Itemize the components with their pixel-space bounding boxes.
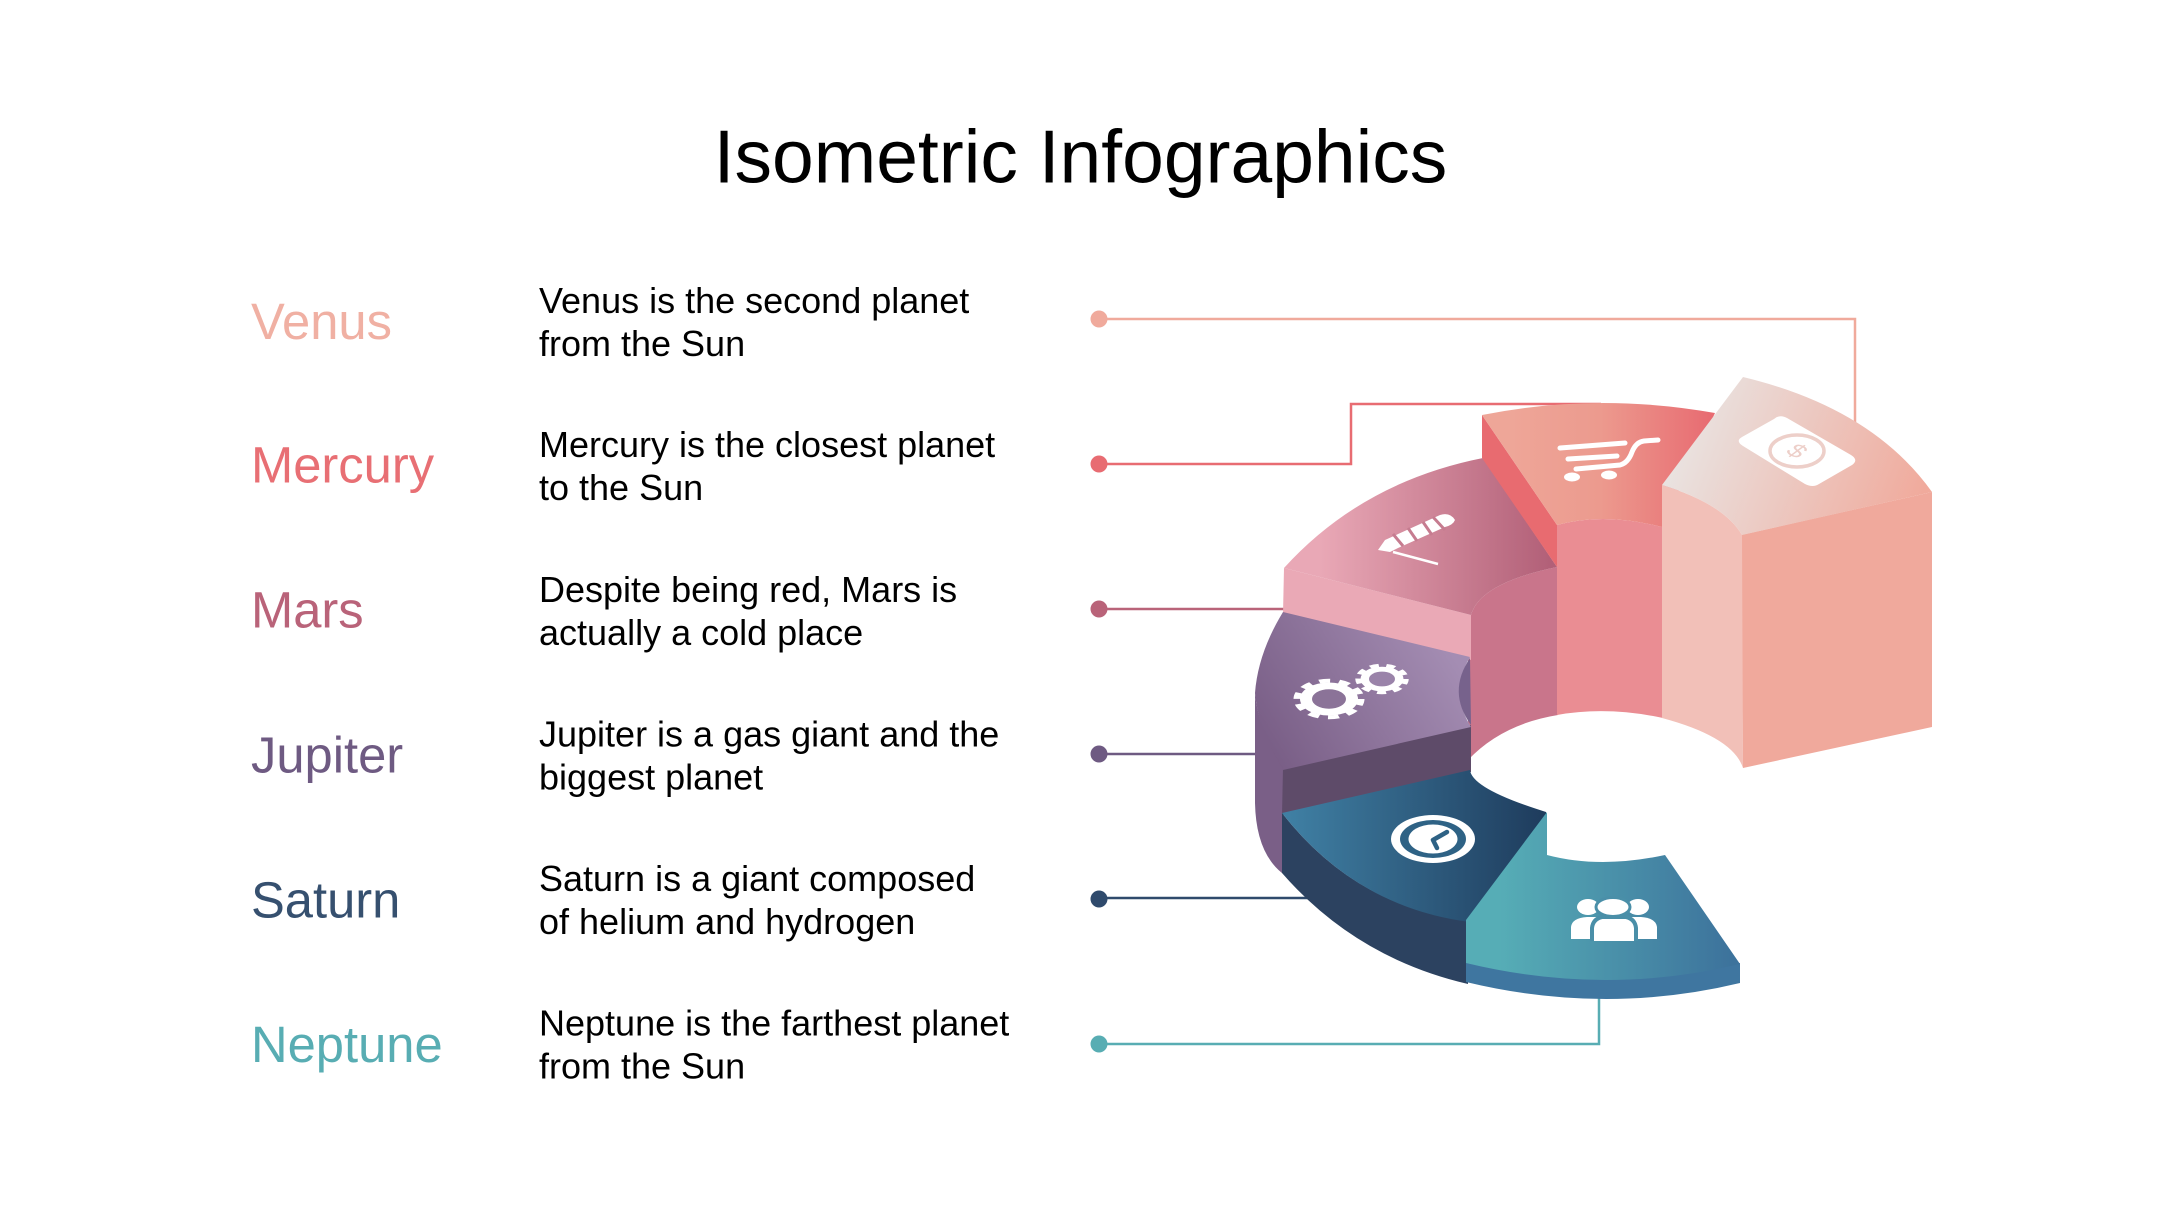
connector: Neptune [1090,990,1599,1052]
text: Neptune description: Neptune is the farthest planet [539,1002,1009,1044]
text: Jupiter description: biggest planet [539,756,763,798]
text: Venus description: from the Sun [539,323,745,364]
text: Neptune description: from the Sun [539,1046,745,1086]
icon: clock [1391,815,1475,863]
icon: people [1571,898,1657,941]
segment: Jupiter [1255,612,1471,873]
text: Venus description: Venus is the second planet [539,280,969,321]
text: Jupiter description: Jupiter is a gas giant and the [539,714,999,754]
text: Mercury description: to the Sun [539,467,703,508]
segment: Saturn [1282,770,1546,984]
text: Mercury description: Mercury is the closest planet [539,424,995,465]
icon: dollar bill: $ [1780,440,1814,463]
connector: Mars [1090,600,1290,618]
label: Jupiter: Jupiter [251,726,403,784]
text: Saturn description: Saturn is a giant composed [539,858,975,899]
connector: Venus [1090,310,1855,430]
label: Mars: Mars [251,582,364,638]
icon: shopping cart [1560,440,1658,482]
connector: Mercury [1090,404,1601,472]
connector: Jupiter [1090,746,1260,762]
text: Mars description: Despite being red, Mars is [539,569,957,610]
connector: Saturn [1090,890,1310,908]
segment: Mars [1283,458,1558,760]
label: Mercury: Mercury [251,436,435,494]
icon: pencil [1378,514,1455,564]
chart: isometric ring [1255,377,1932,999]
segment: Venus [1662,377,1932,768]
segment: Mercury [1482,403,1715,718]
text: Saturn description: of helium and hydrogen [539,901,915,942]
text: Mars description: actually a cold place [539,612,863,653]
segment: Neptune [1466,812,1740,999]
icon: dollar bill [1739,416,1855,486]
title: Isometric Infographics [714,114,1447,198]
label: Venus: Venus [251,293,392,350]
label: Neptune: Neptune [251,1016,443,1073]
icon: gears [1297,665,1406,717]
label: Saturn: Saturn [251,872,400,928]
